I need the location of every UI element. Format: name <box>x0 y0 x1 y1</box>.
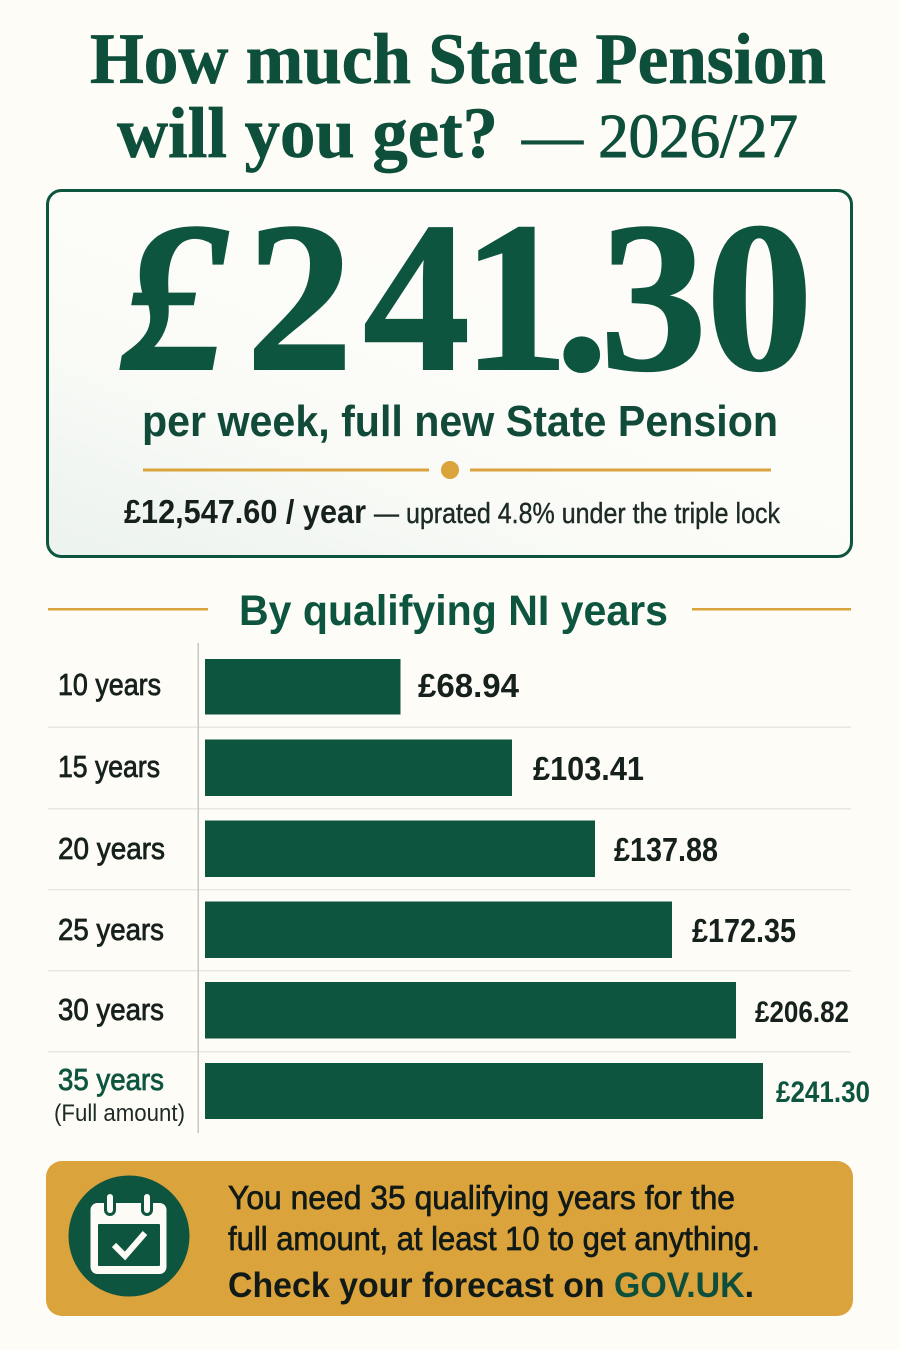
row: 15 years: £103.41 <box>533 750 644 787</box>
row: 20 years: 20 years <box>58 831 165 866</box>
row: 30 years <box>58 982 849 1038</box>
row: 35 years, full amount: (Full amount) <box>54 1100 185 1127</box>
row: 10 years: £68.94 <box>418 667 520 704</box>
callout text: full amount, at least 10 to get anything. <box>228 1220 760 1257</box>
row: 25 years <box>58 902 796 958</box>
row: 20 years: £137.88 <box>614 831 718 868</box>
callout text: You need 35 qualifying years for the <box>228 1179 735 1216</box>
section heading: By qualifying NI years <box>239 587 668 635</box>
row: 35 years, full amount: 35 years <box>58 1062 164 1097</box>
icon: calendar with check <box>68 1176 190 1296</box>
annual amount <box>124 493 780 530</box>
row: 35 years, full amount <box>54 1062 870 1127</box>
callout text <box>228 1179 760 1305</box>
gold divider <box>143 461 771 479</box>
row: 30 years: £206.82 <box>755 996 849 1029</box>
big amount: £241.30 <box>120 179 813 416</box>
title: How much State Pension <box>90 19 826 99</box>
annual amount: £12,547.60 / year <box>124 493 366 530</box>
title: will you get? <box>117 93 498 173</box>
card background <box>48 190 852 556</box>
row: 10 years: 10 years <box>58 667 161 702</box>
row: 15 years <box>58 740 644 796</box>
row: 10 years <box>58 659 520 714</box>
row: 25 years: £172.35 <box>692 912 796 949</box>
row: 20 years <box>58 820 718 877</box>
title: — 2026/27 <box>521 103 798 171</box>
callout background <box>46 1161 853 1316</box>
row: 35 years, full amount: £241.30 <box>776 1076 870 1109</box>
callout text: Check your forecast on GOV.UK. <box>228 1266 754 1305</box>
row: 25 years: 25 years <box>58 912 164 947</box>
bar chart <box>48 643 870 1133</box>
subheading: per week, full new State Pension <box>142 397 778 446</box>
annual amount: — uprated 4.8% under the triple lock <box>374 498 780 530</box>
row: 15 years: 15 years <box>58 749 160 784</box>
callout <box>46 1161 853 1316</box>
title <box>90 19 826 173</box>
panel: headline amount <box>48 179 852 556</box>
row: 30 years: 30 years <box>58 992 164 1027</box>
